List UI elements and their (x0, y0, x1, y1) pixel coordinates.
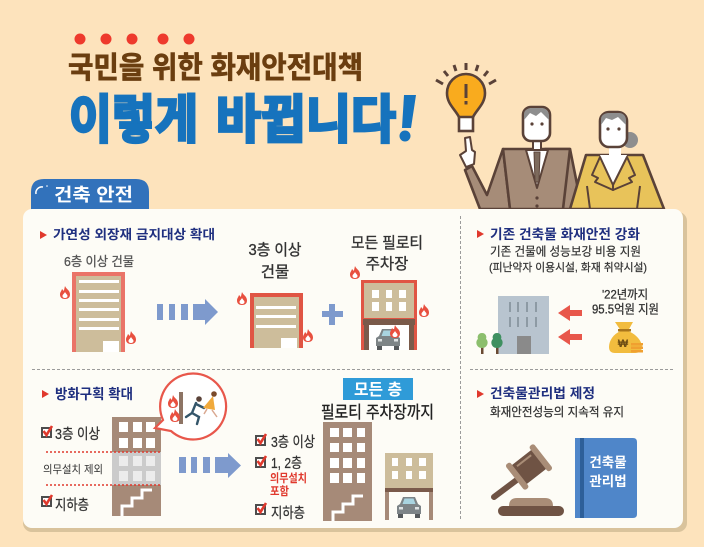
illustration: light bulb (436, 63, 496, 131)
description: (피난약자 이용시설, 화재 취약시설) (489, 260, 647, 274)
description: 기존 건물에 성능보강 비용 지원 (490, 244, 641, 258)
description: 화재안전성능의 지속적 유지 (490, 405, 624, 419)
label: 6층 이상 건물: 6층 이상 건물 (64, 254, 134, 269)
icon: money bag: ₩ (618, 338, 629, 350)
checklist: before: 3층 이상 (55, 426, 100, 443)
icon: gavel (494, 443, 564, 516)
checklist: after: 지하층 (271, 505, 305, 522)
icon: money bag (609, 322, 643, 353)
icon: law book: 관리법 (589, 474, 627, 489)
dashed dividers (32, 216, 675, 520)
funding label: '22년까지 (602, 288, 648, 302)
arrow (157, 299, 218, 325)
building: piloti (385, 453, 433, 520)
callout: evacuation (155, 374, 226, 440)
panel: combustible cladding ban (40, 227, 429, 352)
main panel (23, 209, 687, 532)
description (489, 244, 647, 274)
checklist: after: 의무설치 (270, 471, 307, 485)
panel: fire compartment expansion (42, 374, 434, 522)
red arrows (558, 305, 582, 345)
excluded floors dotted lines (46, 452, 161, 485)
title: main headline: 이렇게 (69, 92, 198, 150)
title: main headline (69, 92, 416, 150)
building: existing (498, 296, 549, 354)
checklist: after: 포함 (270, 484, 289, 498)
label: 모든 필로티 주차장 (351, 234, 423, 273)
section tab: 건축 안전 (31, 179, 149, 212)
badge: 모든 층: 모든 층 (354, 381, 402, 399)
checklist: before: 의무설치 제외 (43, 463, 103, 476)
section tab: 건축 안전: 건축 안전 (54, 185, 133, 205)
title: subtitle line: 국민을 위한 화재안전대책 (68, 52, 363, 85)
badge: 모든 층 (343, 378, 413, 400)
checklist: after (256, 434, 315, 522)
heading: 기존 건축물 화재안전 강화 (490, 227, 641, 242)
illustration: woman (570, 112, 664, 209)
checklist: after: 1, 2층 (271, 455, 302, 472)
label: 3층 이상 건물 (248, 241, 302, 281)
building: six floors (60, 272, 136, 352)
trees (476, 333, 503, 354)
illustration: man (460, 107, 582, 209)
funding label: 95.5억원 지원 (592, 302, 659, 316)
icon: law book (575, 438, 637, 518)
heading: 가연성 외장재 금지대상 확대 (53, 227, 215, 242)
checklist: before (42, 426, 103, 514)
heading: 방화구획 확대 (55, 386, 133, 402)
plus sign (322, 304, 343, 325)
building: three floors (237, 292, 313, 348)
decorative title dots (74, 34, 194, 44)
building: before (112, 417, 161, 516)
label: 3층 이상 건물: 건물 (261, 263, 289, 281)
label: 모든 필로티 주차장: 주차장 (366, 255, 408, 273)
building: tall (323, 422, 372, 521)
checklist: before: 지하층 (55, 497, 89, 514)
panel: building management act (477, 386, 637, 518)
checklist: after: 3층 이상 (271, 434, 315, 451)
title: main headline: 바뀝니다 (216, 92, 396, 150)
funding label (592, 288, 659, 316)
label: 3층 이상 건물: 3층 이상 (248, 241, 302, 259)
label: 모든 필로티 주차장: 모든 필로티 (351, 234, 423, 252)
icon: law book: 건축물 (589, 455, 627, 470)
panel: existing building reinforcement (476, 227, 659, 354)
arrow (179, 453, 241, 478)
label: 필로티 주차장까지: 필로티 주차장까지 (321, 403, 434, 422)
building: piloti parking (350, 266, 429, 350)
heading: 건축물관리법 제정 (490, 386, 595, 401)
